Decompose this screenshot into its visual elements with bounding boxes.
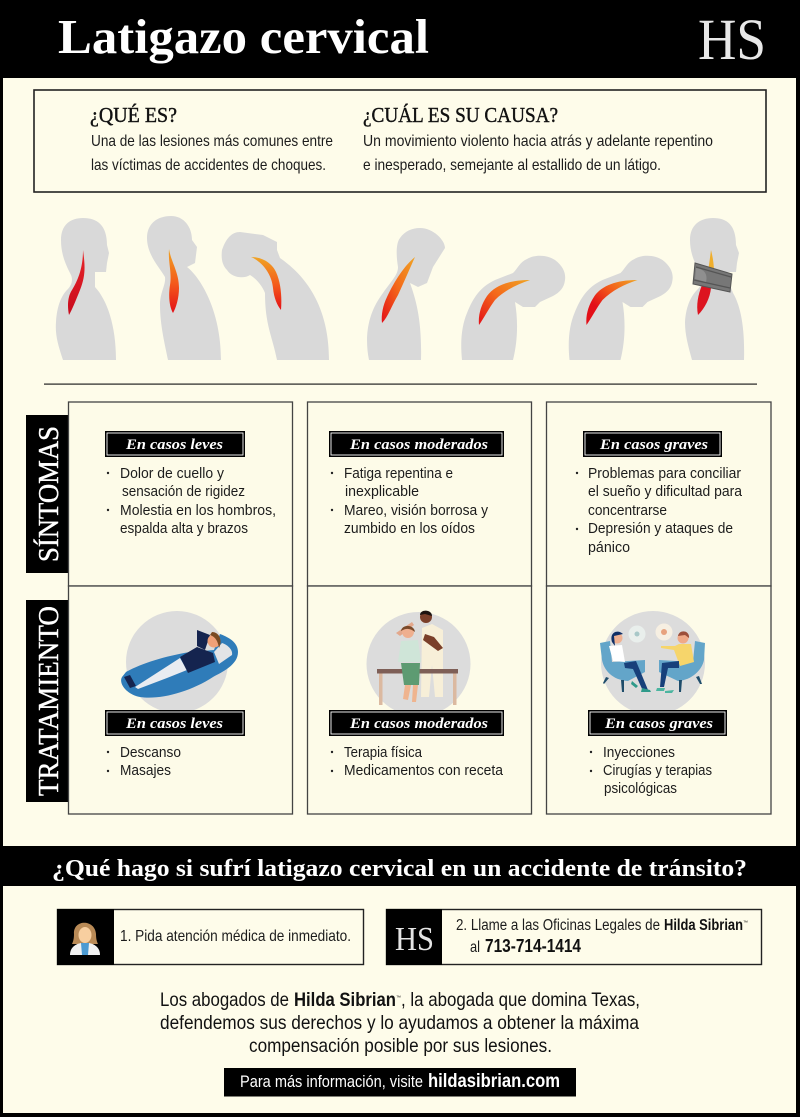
side label: tratamiento: TRATAMIENTO <box>33 606 65 796</box>
website call to action: hildasibrian.com <box>428 1071 560 1092</box>
symptom list: moderate: Mareo, visión borrosa y <box>344 502 488 519</box>
treatment list: mild: Descanso <box>120 744 181 761</box>
treatment list: severe: Inyecciones <box>603 744 675 761</box>
text: step 2: Hilda Sibrian <box>664 917 743 934</box>
symptom list: mild: Molestia en los hombros, <box>120 502 276 519</box>
illustration: physical therapy <box>366 611 470 716</box>
treatment list: mild: Masajes <box>120 762 171 779</box>
label: severe <box>583 431 722 457</box>
text: definition: las víctimas de accidentes de choques. <box>91 157 326 174</box>
closing paragraph: compensación posible por sus lesiones. <box>249 1035 552 1057</box>
text: step 2: 713-714-1414 <box>485 936 581 956</box>
whiplash motion figures <box>56 216 744 360</box>
label: severe: En casos graves <box>604 716 713 732</box>
title: Latigazo cervical <box>58 9 429 64</box>
text: step 2 <box>456 917 748 956</box>
symptom list: severe <box>576 465 743 556</box>
figure 5: flexed forward <box>461 256 565 360</box>
symptom list: severe: Problemas para conciliar <box>588 465 741 482</box>
symptom list: mild: espalda alta y brazos <box>120 520 248 537</box>
panel: treatment moderate <box>308 586 532 814</box>
figure 7: cervical collar <box>685 218 744 360</box>
figure 6: flexed forward <box>569 256 673 360</box>
icon: doctor <box>57 909 114 965</box>
text: step 2: al <box>470 939 480 956</box>
divider line <box>44 384 757 385</box>
text: cause: e inesperado, semejante al estallido de un látigo. <box>363 157 661 174</box>
panel: treatment mild <box>68 586 292 814</box>
symptom list: severe: Depresión y ataques de <box>588 520 733 537</box>
website call to action: Para más información, visite <box>240 1072 423 1091</box>
symptom list: severe: el sueño y dificultad para <box>588 483 743 500</box>
treatment list: severe <box>590 744 712 797</box>
heading: what is it: ¿QUÉ ES? <box>90 103 177 127</box>
panel: symptoms mild <box>68 402 292 586</box>
symptom list: moderate: zumbido en los oídos <box>344 520 475 537</box>
closing paragraph <box>160 989 640 1057</box>
symptom list: severe: pánico <box>588 539 630 556</box>
logo: HS small <box>386 909 442 965</box>
treatment list: moderate: Terapia física <box>344 744 423 761</box>
question band <box>0 846 800 886</box>
label: mild: En casos leves <box>125 437 223 453</box>
logo: HS small: HS <box>395 921 434 958</box>
text: cause <box>363 133 713 174</box>
symptom list: moderate: inexplicable <box>345 483 419 500</box>
heading: cause: ¿CUÁL ES SU CAUSA? <box>363 103 558 127</box>
label: severe <box>588 710 727 736</box>
text: step 1: 1. Pida atención médica de inmediato. <box>120 928 351 945</box>
figure 2: neck back <box>147 216 221 360</box>
closing paragraph: , la abogada que domina Texas, <box>401 989 640 1011</box>
text: step 2: ™ <box>743 920 748 926</box>
panel: treatment severe <box>546 586 771 814</box>
header bar <box>0 0 800 78</box>
label: mild: En casos leves <box>125 716 223 732</box>
symptom list: severe: concentrarse <box>588 502 667 519</box>
treatment list: severe: psicológicas <box>604 780 677 797</box>
label: moderate <box>329 431 504 457</box>
text: definition <box>91 133 333 174</box>
panel: symptoms severe <box>546 402 771 586</box>
closing paragraph: defendemos sus derechos y lo ayudamos a obtener la máxima <box>160 1012 639 1034</box>
illustration: psychological therapy <box>600 611 705 715</box>
label: moderate: En casos moderados <box>349 716 488 732</box>
side label: síntomas <box>26 415 69 573</box>
website call to action <box>224 1068 576 1096</box>
treatment list: mild <box>107 744 181 779</box>
figure 3: head thrown back <box>222 232 329 360</box>
closing paragraph: Hilda Sibrian <box>294 989 396 1011</box>
treatment list: moderate: Medicamentos con receta <box>344 762 504 779</box>
side label: síntomas: SÍNTOMAS <box>32 426 65 562</box>
question band: ¿Qué hago si sufrí latigazo cervical en un accidente de tránsito? <box>52 856 747 882</box>
figure 4: head forward <box>367 228 445 360</box>
symptom list: mild: Dolor de cuello y <box>120 465 224 482</box>
label: mild <box>105 431 245 457</box>
logo: HS: HS <box>698 7 766 72</box>
label: severe: En casos graves <box>599 437 708 453</box>
symptom list: mild <box>107 465 276 537</box>
symptom list: mild: sensación de rigidez <box>122 483 245 500</box>
panel: symptoms moderate <box>308 402 532 586</box>
label: moderate: En casos moderados <box>349 437 488 453</box>
step 2 <box>386 909 762 965</box>
figure 1: upright <box>56 218 116 360</box>
treatment list: moderate <box>331 744 504 779</box>
illustration: resting on lounger <box>121 611 238 713</box>
treatment list: severe: Cirugías y terapias <box>603 762 712 779</box>
symptom list: moderate: Fatiga repentina e <box>344 465 453 482</box>
text: step 2: 2. Llame a las Oficinas Legales de <box>456 917 660 934</box>
label: mild <box>105 710 245 736</box>
closing paragraph: ™ <box>396 995 401 1001</box>
panel: definition and cause <box>34 90 766 192</box>
text: cause: Un movimiento violento hacia atrás y adelante repentino <box>363 133 713 150</box>
step 1 <box>57 909 364 965</box>
label: moderate <box>329 710 504 736</box>
closing paragraph: Los abogados de <box>160 989 289 1011</box>
text: definition: Una de las lesiones más comunes entre <box>91 133 333 150</box>
symptom list: moderate <box>331 465 488 537</box>
